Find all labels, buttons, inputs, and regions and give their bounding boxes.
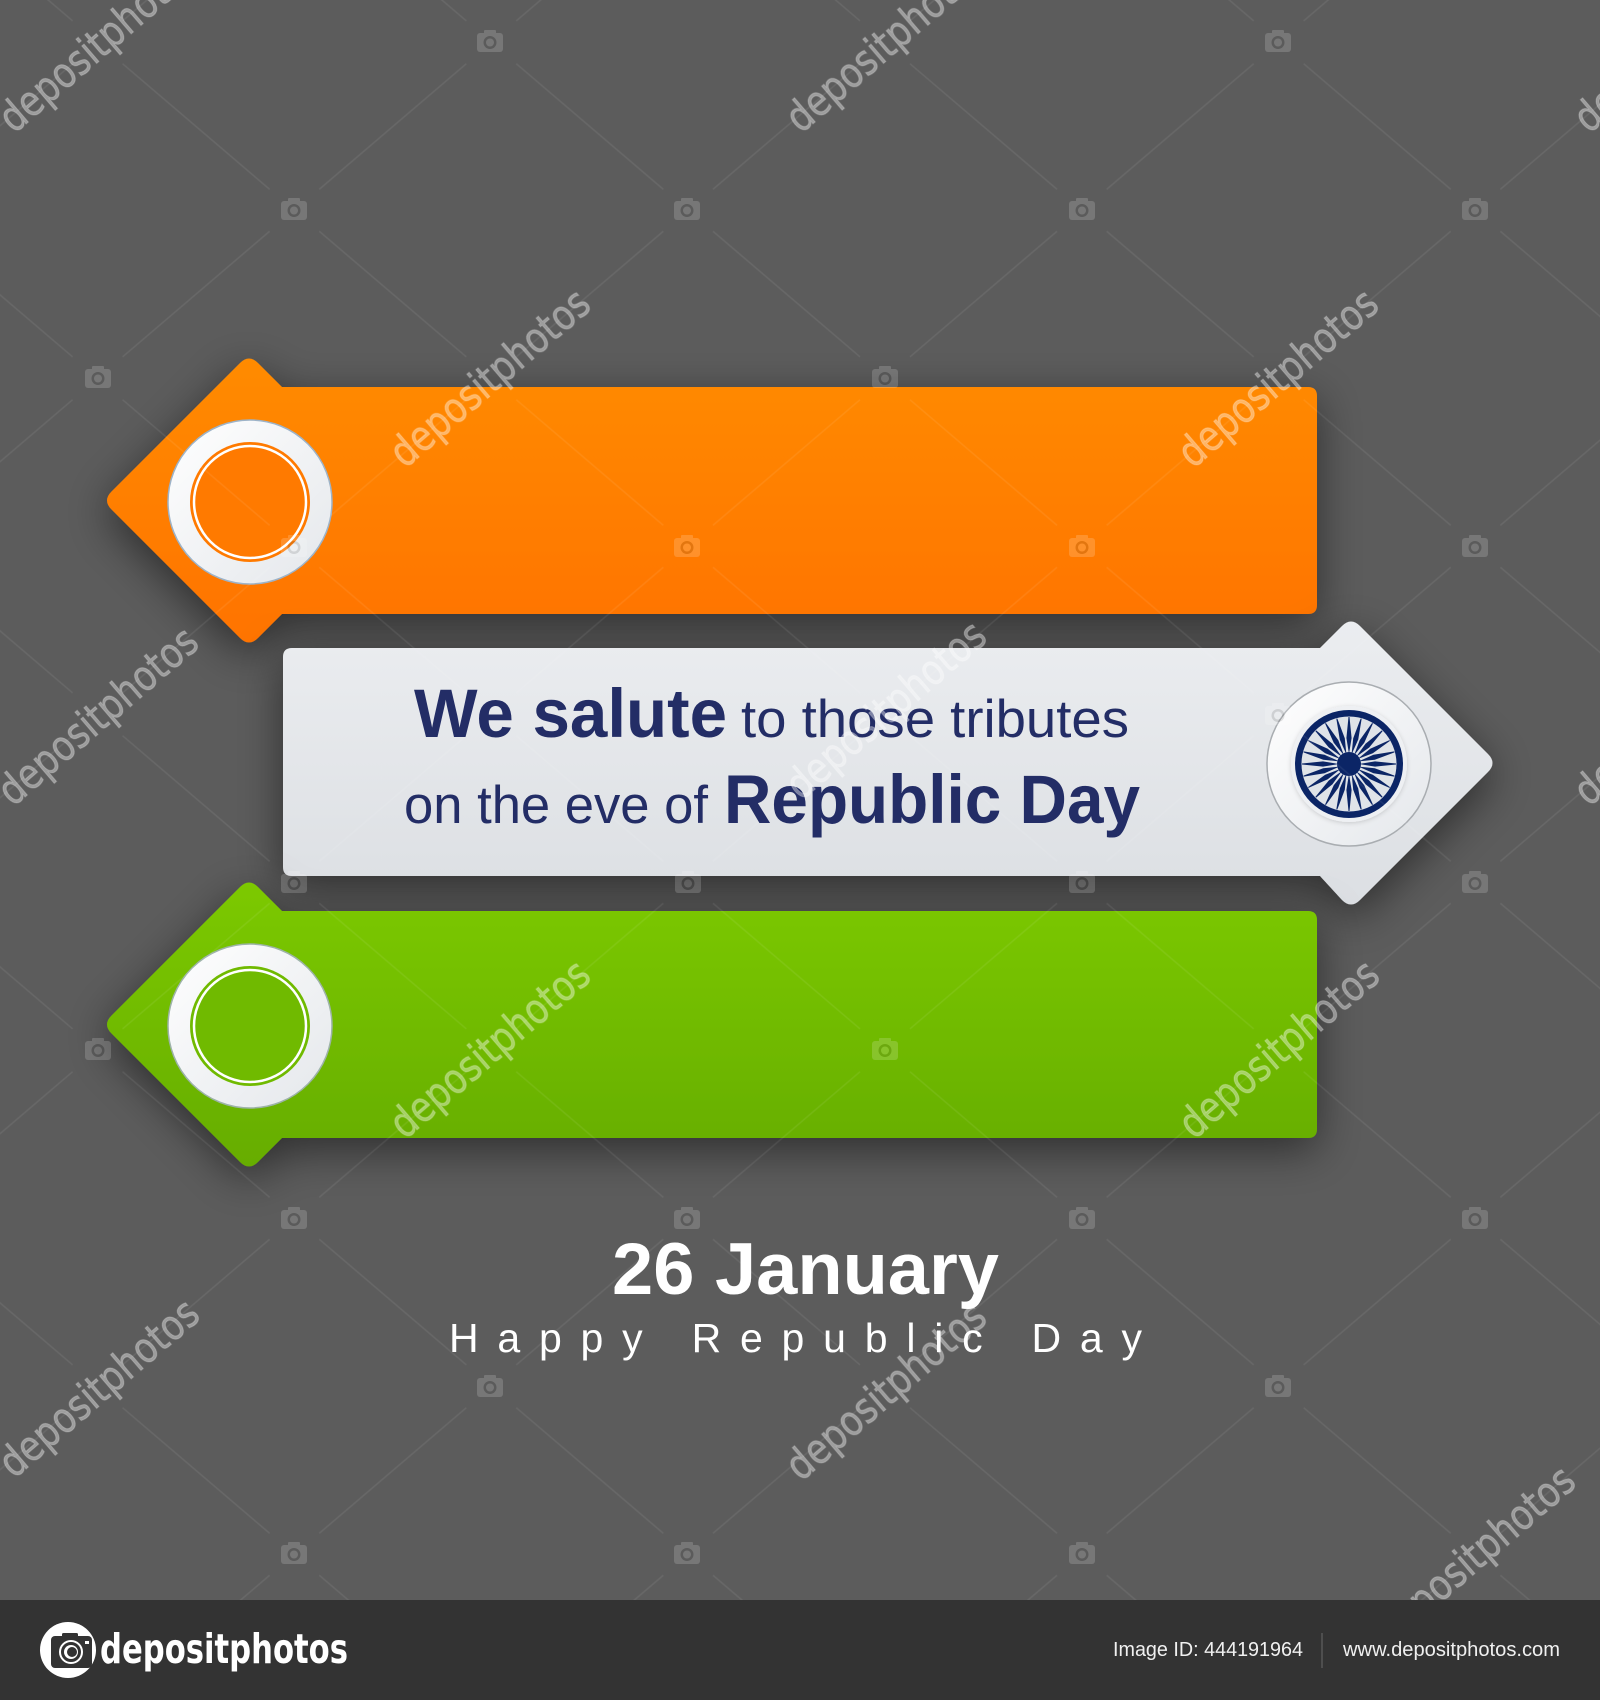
panel: white arrow banner	[283, 622, 1492, 904]
watermark text: depositphotos	[1169, 949, 1389, 1148]
footer bar	[0, 1600, 1600, 1700]
footer logo wordmark: depositphotos	[100, 1625, 348, 1673]
icon: green medallion	[168, 944, 332, 1108]
watermark text: depositphotos	[380, 278, 600, 477]
heading: date: 26 January	[612, 1229, 999, 1310]
watermark text: depositphotos	[380, 949, 600, 1148]
watermark text: depositphotos	[776, 610, 996, 809]
icon: depositphotos camera logo	[40, 1622, 96, 1678]
subheading: Happy Republic Day: Happy Republic Day	[449, 1315, 1142, 1361]
text: salute message: Republic Day	[724, 761, 1140, 838]
icon: orange medallion	[168, 420, 332, 584]
watermark camera icons	[85, 30, 1488, 1564]
text: salute message: on the eve of	[404, 776, 708, 835]
text: salute message	[404, 675, 1140, 838]
panel: green arrow banner	[107, 882, 1317, 1166]
icon: Ashoka chakra medallion	[1267, 682, 1431, 846]
watermark text: depositphotos	[776, 1291, 996, 1490]
image ID: Image ID: 444191964	[1113, 1639, 1303, 1661]
website URL: www.depositphotos.com	[1342, 1639, 1560, 1661]
text: salute message: We salute	[414, 675, 727, 752]
text: salute message: to those tributes	[741, 690, 1129, 749]
panel: orange arrow banner	[107, 358, 1317, 642]
watermark text: depositphotos	[1168, 278, 1388, 477]
